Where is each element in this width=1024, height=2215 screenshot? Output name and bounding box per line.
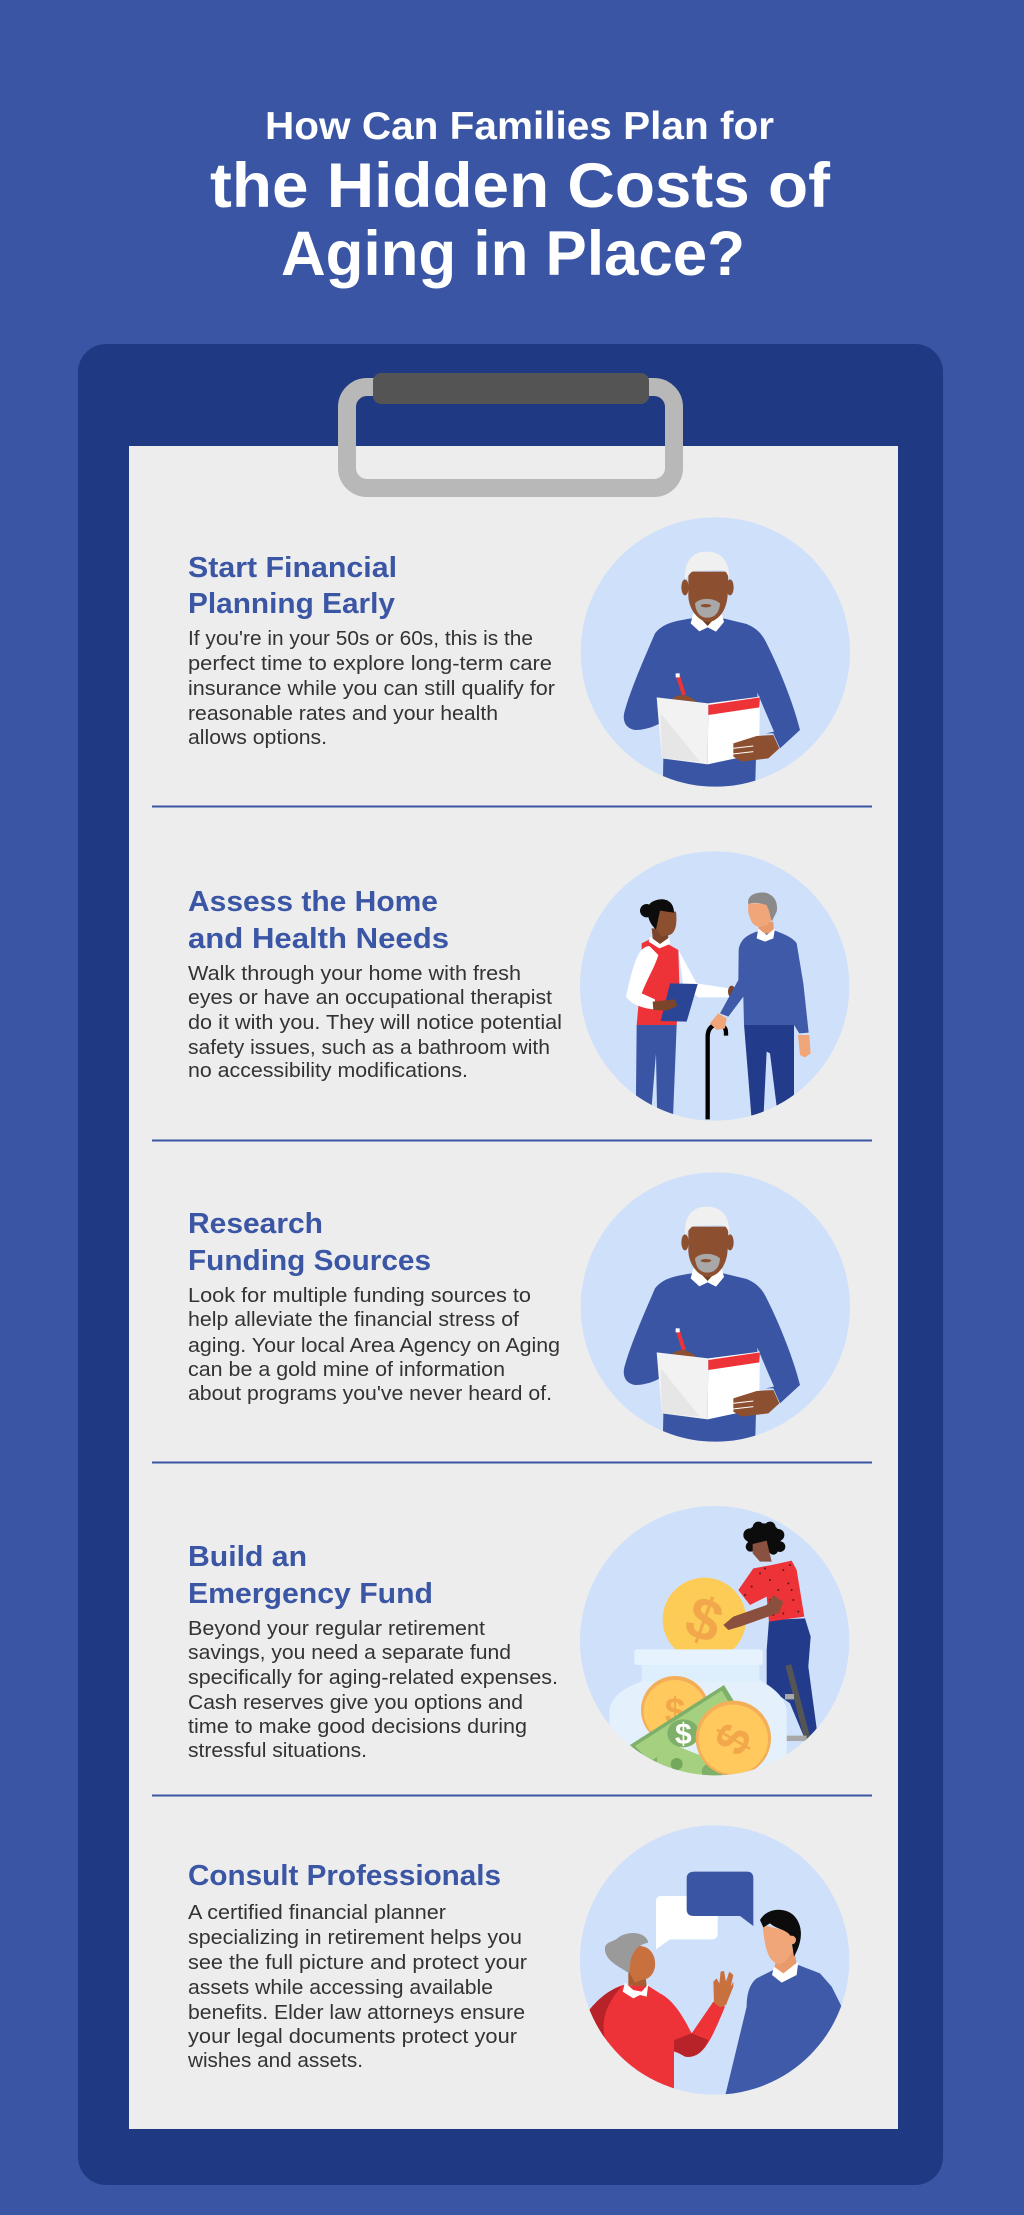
- icon: caregiver with clipboard and older man with cane: [580, 851, 849, 1127]
- text block: consult professionals: your legal documents protect your: [188, 2026, 517, 2048]
- text block: assess the home and health needs: [188, 963, 562, 1082]
- text block: build an emergency fund: stressful situations.: [188, 1740, 367, 1762]
- heading: build an emergency fund: Emergency Fund: [188, 1578, 433, 1610]
- text block: assess the home and health needs: do it with you. They will notice potential: [188, 1012, 562, 1034]
- icon: older man writing in a notebook: [581, 517, 850, 793]
- text block: assess the home and health needs: safety issues, such as a bathroom with: [188, 1037, 550, 1059]
- text block: start financial planning early: allows options.: [188, 727, 327, 749]
- text block: build an emergency fund: [188, 1618, 558, 1762]
- text block: consult professionals: wishes and assets.: [187, 2050, 363, 2072]
- heading: assess the home and health needs: and Health Needs: [188, 923, 449, 955]
- text block: build an emergency fund: Cash reserves give you options and: [188, 1692, 523, 1714]
- text block: start financial planning early: insurance while you can still qualify for: [188, 678, 555, 700]
- text block: research funding sources: [188, 1285, 560, 1405]
- heading: assess the home and health needs: Assess the Home: [188, 886, 438, 918]
- panel: start financial planning early: [188, 517, 850, 793]
- text block: consult professionals: [187, 1902, 527, 2072]
- clipboard clip: [347, 373, 674, 488]
- text block: research funding sources: aging. Your local Area Agency on Aging: [188, 1335, 560, 1357]
- heading: start financial planning early: Planning Early: [188, 588, 395, 620]
- title: the Hidden Costs of: [210, 151, 831, 221]
- text block: research funding sources: help alleviate the financial stress of: [188, 1309, 519, 1331]
- heading: start financial planning early: [188, 552, 397, 620]
- heading: research funding sources: Funding Sources: [188, 1245, 431, 1277]
- panel: research funding sources: [188, 1172, 850, 1448]
- text block: assess the home and health needs: Walk through your home with fresh: [188, 963, 521, 985]
- text block: research funding sources: Look for multiple funding sources to: [188, 1285, 531, 1307]
- heading: start financial planning early: Start Financial: [188, 552, 397, 584]
- text block: consult professionals: A certified financial planner: [188, 1902, 446, 1924]
- icon: older man writing in a notebook: [581, 1172, 850, 1448]
- heading: assess the home and health needs: [188, 886, 449, 955]
- icon: older woman talking with an adviser: [580, 1825, 850, 2110]
- icon: woman dropping a coin into a savings jar: $: [704, 1715, 762, 1763]
- heading: consult professionals: Consult Professionals: [188, 1860, 501, 1892]
- text block: assess the home and health needs: no accessibility modifications.: [188, 1060, 468, 1082]
- heading: research funding sources: [188, 1208, 431, 1277]
- text block: assess the home and health needs: eyes or have an occupational therapist: [188, 987, 552, 1009]
- text block: build an emergency fund: specifically for aging-related expenses.: [188, 1667, 558, 1689]
- text block: start financial planning early: [188, 628, 555, 749]
- text block: build an emergency fund: Beyond your regular retirement: [188, 1618, 485, 1640]
- text block: research funding sources: can be a gold mine of information: [188, 1359, 505, 1381]
- icon: woman dropping a coin into a savings jar: $: [677, 1582, 731, 1657]
- text block: start financial planning early: perfect time to explore long-term care: [188, 653, 552, 675]
- text block: consult professionals: specializing in retirement helps you: [188, 1927, 522, 1949]
- heading: build an emergency fund: [188, 1541, 433, 1610]
- panel: consult professionals: [187, 1825, 850, 2110]
- panel: assess the home and health needs: [188, 851, 849, 1127]
- text block: build an emergency fund: savings, you need a separate fund: [188, 1642, 511, 1664]
- text block: consult professionals: benefits. Elder law attorneys ensure: [188, 2002, 525, 2024]
- clipboard board: [78, 344, 943, 2185]
- heading: research funding sources: Research: [188, 1208, 323, 1240]
- text block: build an emergency fund: time to make good decisions during: [188, 1716, 527, 1738]
- paper sheet: [129, 446, 898, 2129]
- icon: woman dropping a coin into a savings jar: [580, 1506, 849, 1783]
- text block: consult professionals: assets while accessing available: [188, 1977, 493, 1999]
- title: [210, 105, 831, 289]
- icon: woman dropping a coin into a savings jar: $: [675, 1718, 692, 1751]
- panel: build an emergency fund: [188, 1506, 849, 1783]
- text block: start financial planning early: reasonable rates and your health: [188, 703, 498, 725]
- text block: consult professionals: see the full picture and protect your: [188, 1952, 527, 1974]
- heading: build an emergency fund: Build an: [188, 1541, 307, 1573]
- icon: woman dropping a coin into a savings jar: $: [665, 1690, 685, 1731]
- text block: start financial planning early: If you're in your 50s or 60s, this is the: [188, 628, 533, 650]
- title: Aging in Place?: [281, 219, 745, 289]
- text block: research funding sources: about programs you've never heard of.: [188, 1383, 552, 1405]
- title: How Can Families Plan for: [265, 105, 774, 148]
